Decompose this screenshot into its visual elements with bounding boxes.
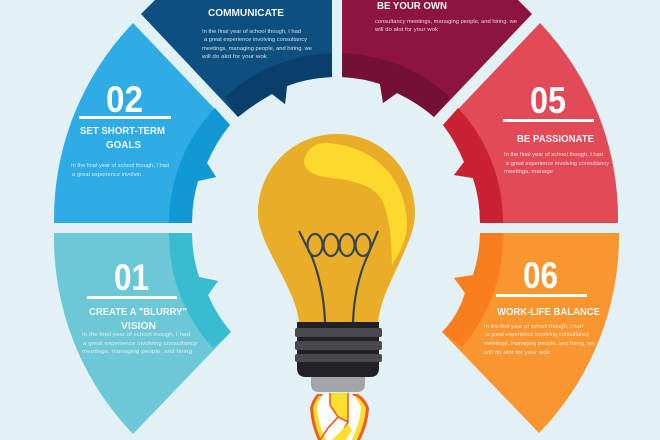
panel: 04 be your own	[342, 0, 532, 117]
body text: will do alot for your wok	[375, 27, 438, 33]
heading: set short-term goals: SET SHORT-TERM	[80, 125, 165, 137]
body text	[484, 324, 595, 356]
body text: will do alot for your wok	[484, 350, 550, 356]
body text: In the final year of school though, I had	[71, 163, 169, 169]
panel: 05 be passionate	[443, 23, 618, 223]
body text: meetings, managing people, and hiring. we	[484, 341, 595, 347]
body text: In the first year of school though, I had	[484, 324, 583, 330]
icon: rocket flame	[310, 393, 369, 440]
body text	[202, 29, 312, 60]
icon: light bulb	[258, 134, 415, 392]
panel: 03 communicate	[141, 0, 332, 117]
body text	[71, 163, 169, 178]
body text: In the final year of school though, I had	[504, 152, 603, 158]
panel: 01 create a blurry vision	[54, 233, 231, 434]
number 05: 05	[530, 80, 566, 121]
bulb highlight	[304, 143, 407, 265]
screw base	[297, 322, 379, 377]
base cap	[311, 377, 365, 392]
body text	[375, 19, 517, 33]
number 02: 02	[106, 79, 143, 120]
number 01: 01	[114, 257, 149, 298]
body text: a great experience involvin	[72, 172, 141, 178]
body text: meetings, managing people, and hiring	[82, 349, 192, 355]
heading: be passionate: BE PASSIONATE	[517, 133, 594, 145]
panel: 02 set short-term goals	[54, 23, 230, 223]
panel: 02 set short-term goals: GOALS	[106, 139, 141, 151]
body text: a great experience involving consultancy	[204, 37, 307, 43]
body text: In the final year of school though, I had	[82, 332, 190, 338]
body text: a great experience involving consultancy	[506, 161, 609, 167]
heading: be your own: BE YOUR OWN	[377, 0, 447, 12]
heading: work-life balance: WORK-LIFE BALANCE	[497, 306, 600, 318]
panel: 01 create a blurry vision: VISION	[121, 320, 156, 332]
body text: will do alot for your wok	[202, 54, 267, 60]
body text	[504, 152, 609, 175]
body text: a great experience involving consultancy	[83, 341, 197, 347]
body text: meetings, manage	[504, 169, 553, 175]
body text: meetings, managing people, and hiring. we	[202, 46, 312, 52]
heading: communicate: COMMUNICATE	[208, 7, 284, 19]
number 06: 06	[523, 255, 558, 296]
panel: 06 work-life balance	[442, 233, 619, 433]
heading: create a blurry vision: CREATE A "BLURRY"	[89, 306, 187, 318]
bulb glass	[258, 134, 415, 322]
filament	[299, 231, 378, 322]
body text: In the final year of school though, I had	[202, 29, 301, 35]
body text: a great experience involving consultancy	[486, 332, 589, 338]
body text	[82, 332, 197, 355]
body text: consultancy meetings, managing people, and hiring. we	[375, 19, 517, 25]
